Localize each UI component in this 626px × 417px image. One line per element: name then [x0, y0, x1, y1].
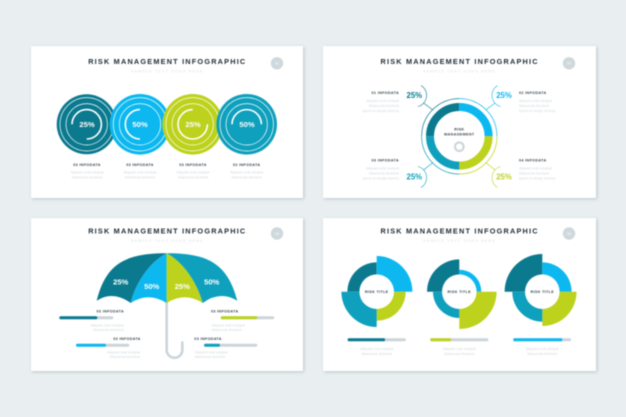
circle: 50% light blue — [110, 94, 170, 155]
circle: 50% teal: 50% — [239, 120, 255, 129]
callout: 03 — [363, 158, 433, 188]
item: right lower: Maecenas tincidunt — [195, 355, 225, 359]
panel: donut — [323, 46, 597, 199]
page number badge — [271, 57, 283, 70]
captions: 03 INFODATA — [73, 163, 101, 167]
callout: 01: Aliquam erat volutpat — [366, 99, 399, 103]
captions: Aliquam erat volutpat — [230, 170, 263, 174]
callout: 04: Ipsum is simply dummy — [519, 176, 556, 180]
circle: 25% lime — [162, 94, 223, 155]
callout: 04: 25% — [496, 173, 512, 182]
progress 1 — [348, 338, 406, 356]
umbrella canopy: 25% — [175, 282, 190, 291]
captions: Aliquam erat volutpat — [71, 170, 103, 174]
subtitle: SAMPLE TEXT GOES HERE — [131, 68, 203, 74]
captions: 03 INFODATA — [179, 163, 207, 167]
captions: Maecenas tincidunt — [178, 176, 208, 180]
item: right lower: 03 INFODATA — [194, 337, 222, 341]
callout: 02: Ipsum is simply dummy — [519, 109, 556, 113]
umbrella canopy: 25% — [113, 278, 129, 286]
page number badge — [563, 227, 575, 240]
circle: 50% teal — [216, 94, 277, 155]
captions: Aliquam erat volutpat — [177, 170, 209, 174]
subtitle: SAMPLE TEXT GOES HERE — [131, 238, 203, 243]
title: RISK MANAGEMENT INFOGRAPHIC — [380, 226, 538, 235]
item: right lower: Aliquam erat volutpat — [195, 350, 228, 354]
item: left lower: Aliquam erat volutpat — [107, 350, 140, 354]
item: left lower — [76, 337, 141, 359]
callout: 01: Maecenas tincidunt — [369, 104, 399, 108]
callout: 01: Ipsum is simply dummy — [363, 109, 399, 113]
captions: Maecenas tincidunt — [125, 176, 155, 180]
callout: 03: Ipsum is simply dummy — [363, 176, 399, 180]
donut center label: RISK — [454, 128, 464, 132]
title: RISK MANAGEMENT INFOGRAPHIC — [88, 57, 246, 66]
sector chart 1: RISK TITLE — [365, 290, 389, 294]
sector chart 2: RISK TITLE — [448, 290, 471, 294]
captions: Maecenas tincidunt — [232, 176, 262, 180]
sector chart 1 — [341, 256, 412, 327]
callout: 02: Maecenas tincidunt — [519, 104, 549, 108]
item: left upper — [59, 309, 124, 332]
callout: 02: 02 INFODATA — [519, 91, 546, 95]
umbrella canopy: 50% — [204, 278, 220, 286]
page number badge: 03 — [275, 232, 279, 236]
umbrella canopy: 50% — [144, 282, 160, 291]
callout: 02: Aliquam erat volutpat — [519, 99, 552, 103]
item: right upper: Maecenas tincidunt — [212, 328, 242, 332]
callout: 02 — [486, 86, 556, 113]
item: right upper: 03 INFODATA — [211, 309, 238, 313]
progress 3 — [513, 338, 571, 356]
progress 2: Maecenas tincidunt — [444, 352, 474, 356]
progress 2 — [430, 338, 488, 356]
callout: 01: 25% — [406, 91, 422, 100]
callout: 01: 01 INFODATA — [372, 91, 399, 95]
circle: 25% dark teal — [57, 94, 117, 154]
item: right upper: Aliquam erat volutpat — [212, 323, 245, 327]
progress 1: Maecenas tincidunt — [362, 352, 392, 356]
callout: 02: 25% — [496, 91, 512, 100]
captions: 03 INFODATA — [126, 163, 154, 167]
title: RISK MANAGEMENT INFOGRAPHIC — [380, 57, 538, 66]
item: right lower — [194, 337, 257, 359]
page number badge: 04 — [567, 232, 571, 236]
circle: 25% lime: 25% — [185, 120, 201, 129]
callout: 03: 03 INFODATA — [372, 158, 399, 162]
callout: 01 — [363, 86, 433, 113]
item: left lower: 03 INFODATA — [113, 337, 141, 341]
sector chart 3: RISK TITLE — [531, 290, 554, 294]
progress 2: Aliquam erat volutpat — [443, 347, 476, 351]
item: left upper: Aliquam erat volutpat — [91, 323, 124, 327]
item: left lower: Maecenas tincidunt — [110, 355, 140, 359]
callout: 03: 25% — [406, 173, 422, 182]
captions: Maecenas tincidunt — [72, 176, 102, 180]
progress 3: Maecenas tincidunt — [527, 352, 557, 356]
callout: 03: Aliquam erat volutpat — [366, 166, 399, 170]
donut center label — [444, 128, 475, 151]
page number badge — [271, 227, 283, 240]
page number badge — [563, 57, 575, 70]
donut chart — [422, 99, 497, 174]
captions — [71, 163, 263, 180]
umbrella handle — [167, 300, 182, 358]
subtitle: SAMPLE TEXT GOES HERE — [423, 68, 495, 74]
page number badge: 02 — [567, 62, 571, 66]
callout: 04: Maecenas tincidunt — [519, 172, 549, 176]
progress 3: Aliquam erat volutpat — [526, 347, 559, 351]
item: left upper: Maecenas tincidunt — [93, 328, 124, 332]
donut center label: MANAGEMENT — [444, 132, 475, 136]
progress 1: Aliquam erat volutpat — [360, 347, 393, 351]
item: right upper — [211, 309, 274, 332]
circle: 25% dark teal: 25% — [79, 120, 95, 129]
callout: 04 — [486, 158, 556, 188]
umbrella canopy — [97, 253, 237, 303]
page number badge: 01 — [275, 62, 279, 66]
captions: Aliquam erat volutpat — [124, 170, 156, 174]
callout: 03: Maecenas tincidunt — [369, 172, 399, 176]
item: left upper: 03 INFODATA — [97, 309, 124, 313]
callout: 04: 04 INFODATA — [519, 158, 546, 162]
panel: umbrella — [31, 218, 304, 372]
title: RISK MANAGEMENT INFOGRAPHIC — [88, 226, 246, 235]
sector chart 3 — [505, 254, 577, 326]
callout: 04: Aliquam erat volutpat — [519, 166, 552, 170]
subtitle: SAMPLE TEXT GOES HERE — [423, 238, 495, 243]
panel: concentric circles — [31, 46, 304, 199]
panel: radial sectors — [323, 218, 597, 372]
sector chart 2 — [427, 259, 497, 329]
captions: 02 INFODATA — [233, 163, 260, 167]
circle: 50% light blue: 50% — [132, 120, 148, 129]
